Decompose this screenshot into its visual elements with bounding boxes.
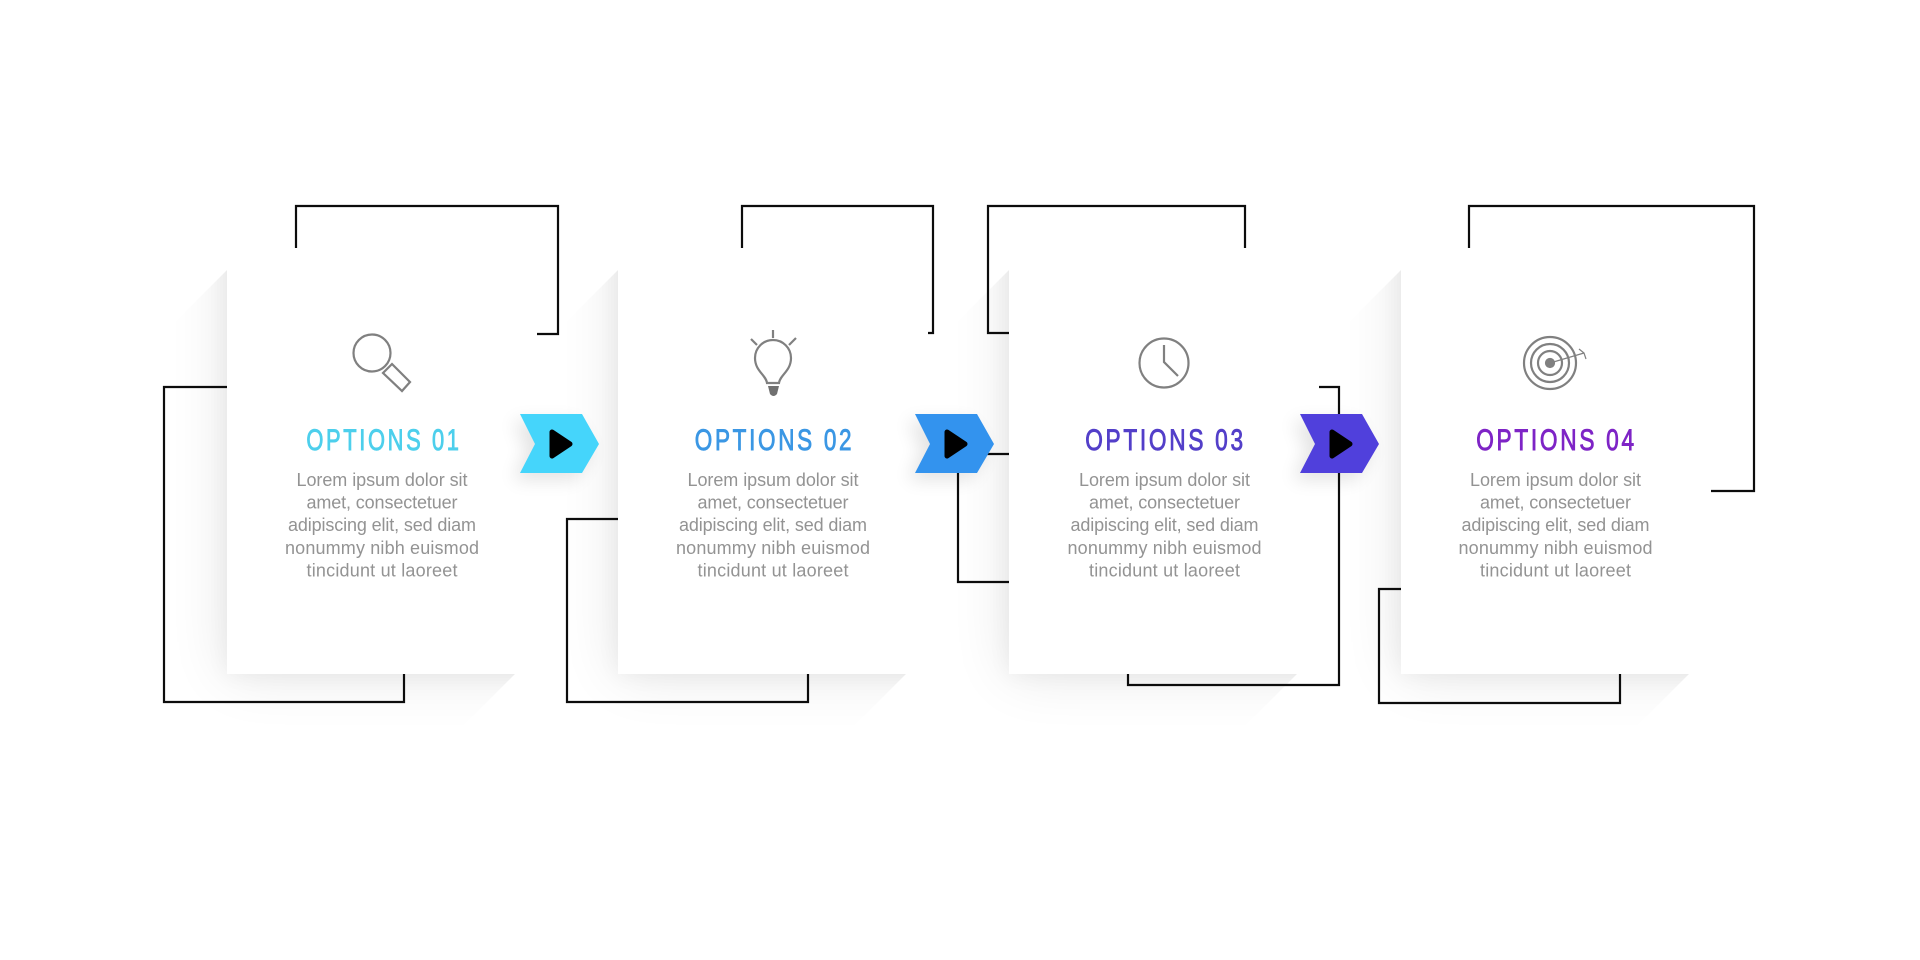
text block: options 02: tincidunt ut laoreet xyxy=(698,560,848,580)
panel: options 02 xyxy=(676,330,870,580)
text block: options 01: tincidunt ut laoreet xyxy=(306,560,458,580)
shadow: card 2 xyxy=(602,270,906,690)
text block: options 03: Lorem ipsum dolor sit xyxy=(1079,470,1250,490)
card 1 background xyxy=(227,270,515,674)
bracket: card 3 top xyxy=(988,206,1245,333)
text block: options 03: tincidunt ut laoreet xyxy=(1089,560,1240,580)
icon: clock xyxy=(1140,338,1188,388)
bracket: card 2 bottom xyxy=(567,519,808,702)
panel: options 04 xyxy=(1458,337,1652,580)
bracket: card 4 bottom xyxy=(1379,589,1620,703)
shadow: card 4 xyxy=(1385,270,1689,690)
card 3 background xyxy=(1009,270,1297,674)
text block: options 02 xyxy=(676,470,870,580)
arrow: chevron 3 xyxy=(1293,414,1379,480)
text block: options 01: Lorem ipsum dolor sit xyxy=(296,470,468,490)
text block: options 04: tincidunt ut laoreet xyxy=(1480,560,1631,580)
shadow: card 3 xyxy=(993,270,1297,690)
text block: options 03: adipiscing elit, sed diam xyxy=(1070,515,1258,535)
bracket: card 2 top xyxy=(742,206,933,333)
heading: options 04: OPTIONS 04 xyxy=(1476,423,1637,457)
arrow: chevron 2 xyxy=(908,414,994,480)
text block: options 02: nonummy nibh euismod xyxy=(676,538,870,558)
bracket: card 4 top xyxy=(1469,206,1754,491)
text block: options 04: nonummy nibh euismod xyxy=(1458,538,1652,558)
text block: options 02: amet, consectetuer xyxy=(698,492,848,512)
panel: options 03 xyxy=(1068,338,1262,580)
text block: options 03: amet, consectetuer xyxy=(1089,492,1240,512)
heading: options 03: OPTIONS 03 xyxy=(1085,423,1246,457)
text block: options 04 xyxy=(1458,470,1652,580)
text block: options 02: Lorem ipsum dolor sit xyxy=(688,470,858,490)
bracket: card 1 top xyxy=(296,206,558,334)
icon: magnifier xyxy=(354,334,410,391)
shadow: card 1 xyxy=(211,270,515,690)
bracket: card 3 right xyxy=(1128,387,1339,685)
text block: options 04: Lorem ipsum dolor sit xyxy=(1470,470,1641,490)
text block: options 04: amet, consectetuer xyxy=(1480,492,1631,512)
text block: options 03: nonummy nibh euismod xyxy=(1068,538,1262,558)
heading: options 02: OPTIONS 02 xyxy=(695,423,854,457)
icon: light bulb xyxy=(751,330,796,396)
arrow: chevron 1 xyxy=(513,414,599,480)
bracket: card 1 bottom xyxy=(164,387,404,702)
text block: options 03 xyxy=(1068,470,1262,580)
heading: options 01: OPTIONS 01 xyxy=(306,423,462,457)
text block: options 01 xyxy=(285,470,479,580)
card 4 background xyxy=(1401,270,1689,674)
text block: options 04: adipiscing elit, sed diam xyxy=(1462,515,1650,535)
icon: target xyxy=(1524,337,1586,389)
text block: options 01: nonummy nibh euismod xyxy=(285,538,479,558)
text block: options 01: adipiscing elit, sed diam xyxy=(288,515,476,535)
bracket: card 3 left xyxy=(958,454,1009,582)
panel: options 01 xyxy=(285,334,479,580)
text block: options 01: amet, consectetuer xyxy=(306,492,458,512)
card 2 background xyxy=(618,270,906,674)
text block: options 02: adipiscing elit, sed diam xyxy=(679,515,867,535)
